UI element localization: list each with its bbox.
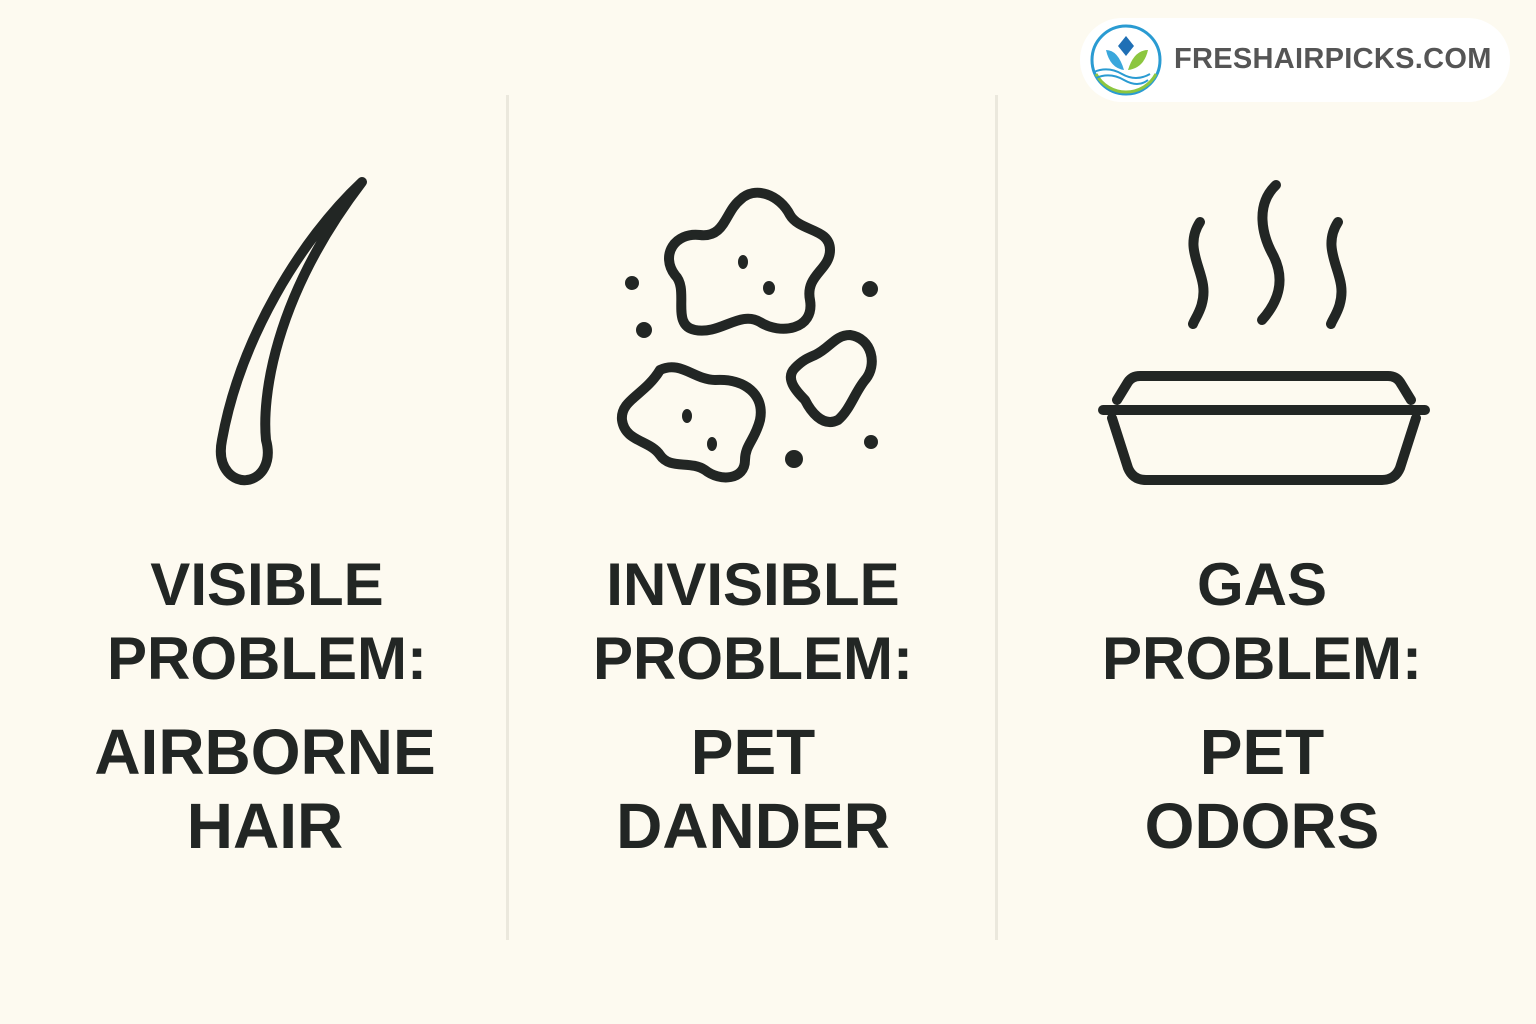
text: column 2 heading: INVISIBLE <box>606 551 900 618</box>
text: column 3 subject: ODORS <box>1145 790 1379 862</box>
text: column 2 subject: DANDER <box>616 790 890 862</box>
logo badge <box>1080 18 1510 102</box>
text: column 3 subject: PET <box>1200 716 1324 788</box>
text: column 3 heading: PROBLEM: <box>1102 625 1422 692</box>
text: column 1 subject: HAIR <box>187 790 343 862</box>
text: column 1 subject <box>94 716 436 862</box>
icon: hair strand <box>216 177 367 486</box>
icon: pet dander <box>616 188 878 482</box>
text: column 1 heading <box>107 551 427 692</box>
text: column 2 heading: PROBLEM: <box>593 625 913 692</box>
text: column 1 subject: AIRBORNE <box>94 716 436 788</box>
text: column 3 heading: GAS <box>1197 551 1327 618</box>
text: column 2 subject: PET <box>691 716 815 788</box>
text: column 2 heading <box>593 551 913 692</box>
text: column 3 subject <box>1145 716 1379 862</box>
text: column 3 heading <box>1102 551 1422 692</box>
icon: litter box with steam <box>1098 180 1430 485</box>
text: column 2 subject <box>616 716 890 862</box>
text: column 1 heading: PROBLEM: <box>107 625 427 692</box>
icon: logo emblem <box>1090 24 1162 96</box>
text: column 1 heading: VISIBLE <box>150 551 384 618</box>
logo text: FRESHAIRPICKS.COM <box>1174 43 1492 75</box>
